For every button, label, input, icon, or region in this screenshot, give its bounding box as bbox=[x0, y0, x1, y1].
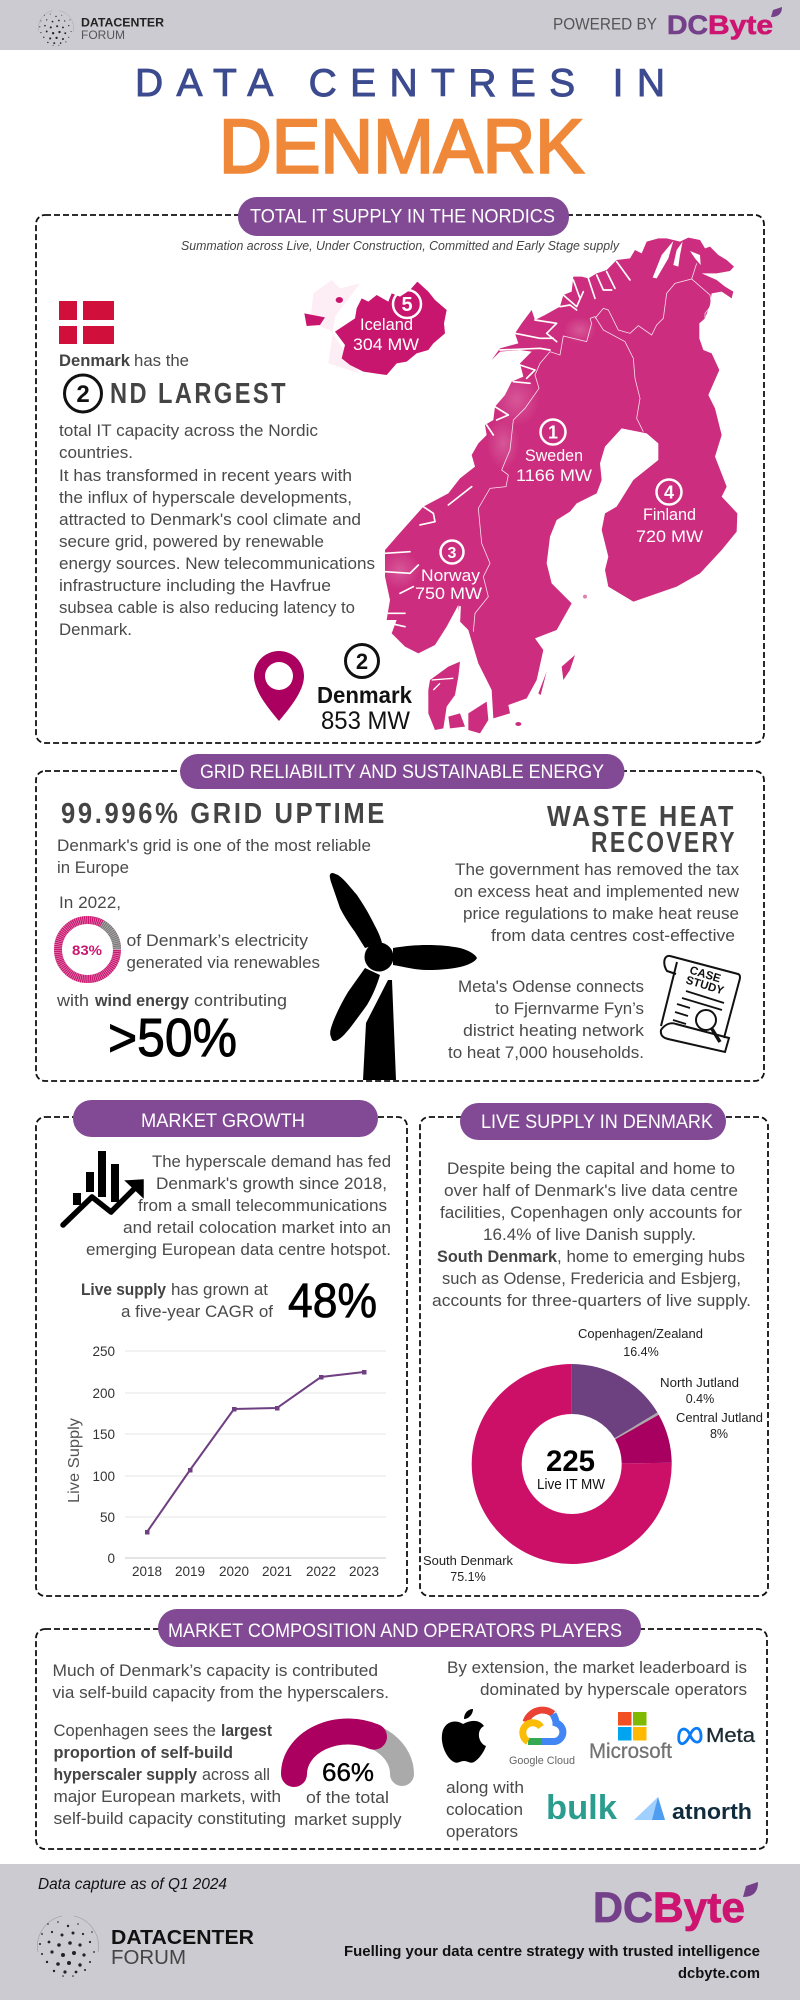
text: leaderboard: By extension, the market leaderboard is bbox=[447, 1659, 747, 1677]
label: Denmark: 853 MW bbox=[321, 707, 410, 735]
label: Finland bbox=[636, 480, 703, 546]
donut chart: live IT MW by region: North Jutland bbox=[660, 1376, 739, 1390]
line chart: live supply: 2019 bbox=[175, 1564, 205, 1579]
text: Denmark has the bbox=[59, 352, 189, 370]
text: hyperscale demand: The hyperscale demand has fed bbox=[152, 1153, 391, 1171]
label: Finland: 4 bbox=[664, 482, 674, 502]
text: self-build capacity: Much of Denmark’s capacity is contributed bbox=[52, 1662, 378, 1680]
label: Sweden bbox=[516, 420, 592, 485]
label: Denmark: Denmark bbox=[317, 682, 412, 708]
text: live supply summary: such as Odense, Fredericia and Esbjerg, bbox=[442, 1270, 741, 1288]
powered by DCByte: Byte bbox=[708, 10, 773, 40]
powered by DCByte bbox=[553, 7, 782, 40]
label: Norway: 3 bbox=[448, 545, 457, 562]
title: DENMARK bbox=[219, 105, 584, 190]
text: Meta Odense case: district heating network bbox=[463, 1022, 645, 1040]
donut chart: live IT MW by region bbox=[423, 1327, 763, 1584]
footer bbox=[0, 1864, 800, 2000]
icon: map pin bbox=[254, 651, 304, 721]
label: Denmark: 2 bbox=[356, 649, 368, 674]
line chart: live supply bbox=[66, 1344, 386, 1579]
body text: secure grid, powered by renewable bbox=[59, 533, 324, 551]
logo: Google Cloud: Google Cloud bbox=[509, 1755, 575, 1767]
map: Iceland and Greenland bbox=[304, 280, 447, 375]
donut chart: live IT MW by region: Copenhagen/Zealand bbox=[578, 1327, 703, 1341]
heading pill bbox=[460, 1103, 726, 1140]
text: live supply CAGR: Live supply bbox=[81, 1281, 167, 1299]
logo: Microsoft bbox=[589, 1712, 672, 1763]
line chart: live supply: 2020 bbox=[219, 1564, 249, 1579]
heading: grid uptime: 99.996% GRID UPTIME bbox=[61, 798, 387, 830]
text: live supply summary: Despite being the capital and home to bbox=[447, 1160, 735, 1178]
text: Copenhagen self-build: largest bbox=[221, 1722, 272, 1740]
text: Meta Odense case bbox=[448, 978, 645, 1062]
heading pill bbox=[238, 197, 569, 236]
text: hyperscale demand bbox=[86, 1153, 391, 1259]
line chart: live supply: 250 bbox=[92, 1344, 115, 1359]
map: Scandinavian mainland bbox=[380, 238, 737, 718]
icon: case study scroll: STUDY bbox=[684, 975, 725, 997]
label: Denmark bbox=[317, 644, 412, 735]
line chart: live supply: 0 bbox=[107, 1551, 115, 1566]
chart: 83% renewables ring bbox=[47, 909, 128, 990]
heading pill: TOTAL IT SUPPLY IN THE NORDICS bbox=[250, 207, 555, 228]
panel: total IT supply in the Nordics bbox=[36, 197, 764, 743]
body text bbox=[59, 422, 375, 639]
text: hyperscale demand: from a small telecommunications bbox=[138, 1197, 387, 1215]
label: Iceland bbox=[353, 290, 421, 354]
panel: market composition and operator players bbox=[36, 1609, 767, 1849]
text: colocation operators: along with bbox=[446, 1779, 524, 1797]
donut chart: live IT MW by region: Live IT MW bbox=[537, 1476, 606, 1493]
tagline bbox=[344, 1943, 760, 1982]
donut chart: live IT MW by region: 16.4% bbox=[623, 1345, 659, 1359]
text: waste heat policy: price regulations to make heat reuse bbox=[463, 905, 739, 923]
icon: case study scroll bbox=[661, 956, 740, 1052]
logo: bulk: bulk bbox=[546, 1789, 617, 1827]
chart: 66% gauge: market supply bbox=[294, 1811, 402, 1829]
icon: Danish flag bbox=[59, 301, 114, 344]
title: DATA CENTRES IN bbox=[135, 62, 665, 105]
line chart: live supply: 150 bbox=[92, 1427, 115, 1442]
donut chart: live IT MW by region: 225 bbox=[546, 1445, 595, 1478]
text: Copenhagen self-build: across all bbox=[202, 1766, 270, 1784]
text: hyperscale demand: emerging European data centre hotspot. bbox=[86, 1241, 391, 1259]
map: Nordic countries bbox=[304, 238, 737, 733]
heading: waste heat recovery bbox=[547, 801, 737, 859]
powered by DCByte: POWERED BY bbox=[553, 14, 657, 33]
text: waste heat policy: The government has removed the tax bbox=[455, 861, 740, 879]
stat: over 50 percent: >50% bbox=[108, 1008, 237, 1068]
heading: waste heat recovery: RECOVERY bbox=[591, 827, 737, 859]
heading pill bbox=[180, 754, 624, 789]
heading pill bbox=[73, 1100, 378, 1137]
text: Copenhagen self-build: proportion of self-build bbox=[54, 1744, 233, 1762]
text: colocation operators: operators bbox=[446, 1823, 518, 1841]
text: Denmark has the: has the bbox=[134, 352, 189, 370]
label: Iceland: 5 bbox=[401, 294, 413, 316]
line chart: live supply: 2023 bbox=[349, 1564, 379, 1579]
text: waste heat policy bbox=[454, 861, 740, 945]
chart: 83% renewables ring: 83% bbox=[72, 943, 102, 958]
panel: market growth bbox=[36, 1100, 407, 1596]
logo: Datacenter Forum: FORUM bbox=[81, 28, 125, 42]
logo: Google Cloud bbox=[509, 1710, 575, 1767]
tagline: Fuelling your data centre strategy with trusted intelligence bbox=[344, 1943, 760, 1960]
body text: total IT capacity across the Nordic bbox=[59, 422, 318, 440]
text: wind energy: wind energy bbox=[94, 992, 190, 1010]
logo: DCByte: DC bbox=[593, 1884, 653, 1932]
heading pill: MARKET GROWTH bbox=[141, 1111, 305, 1132]
text: live supply CAGR bbox=[81, 1281, 273, 1321]
text: hyperscale demand: Denmark's growth since 2018, bbox=[156, 1175, 387, 1193]
icon: growth chart arrow bbox=[63, 1151, 143, 1225]
title bbox=[135, 62, 665, 190]
label: Sweden: Sweden bbox=[525, 446, 583, 465]
body text: countries. bbox=[59, 444, 133, 462]
callout: 2nd largest: 2 bbox=[76, 381, 90, 408]
line chart: live supply: 2018 bbox=[132, 1564, 162, 1579]
text: grid reliability: in Europe bbox=[57, 859, 129, 877]
text: wind energy: with bbox=[56, 992, 89, 1010]
line chart: live supply: 50 bbox=[100, 1510, 115, 1525]
icon: case study scroll: CASE bbox=[688, 965, 722, 986]
subtitle: Summation across Live, Under Construction, Committed and Early Stage supply bbox=[181, 238, 620, 253]
label: Sweden: 1166 MW bbox=[516, 466, 592, 485]
text: renewables bbox=[126, 932, 320, 972]
text: Denmark has the: Denmark bbox=[59, 352, 131, 370]
powered by DCByte: DC bbox=[667, 10, 708, 40]
heading: waste heat recovery: WASTE HEAT bbox=[547, 801, 736, 833]
text: Copenhagen self-build: Copenhagen sees the bbox=[54, 1722, 216, 1740]
text: wind energy bbox=[56, 992, 287, 1010]
text: Meta Odense case: to Fjernvarme Fyn’s bbox=[495, 1000, 644, 1018]
tagline: dcbyte.com bbox=[678, 1965, 760, 1982]
header bar bbox=[0, 0, 800, 50]
body text: attracted to Denmark's cool climate and bbox=[59, 511, 361, 529]
callout: 2nd largest bbox=[64, 375, 288, 412]
heading pill: GRID RELIABILITY AND SUSTAINABLE ENERGY bbox=[200, 762, 604, 783]
text: Meta Odense case: Meta's Odense connects bbox=[458, 978, 644, 996]
callout: 2nd largest: ND LARGEST bbox=[110, 378, 288, 410]
logo: Datacenter Forum: FORUM bbox=[111, 1947, 186, 1969]
heading pill bbox=[158, 1609, 641, 1647]
body text: subsea cable is also reducing latency to bbox=[59, 599, 355, 617]
text: Copenhagen self-build: major European markets, with bbox=[54, 1788, 281, 1806]
label: Norway bbox=[415, 540, 482, 603]
data capture note: Data capture as of Q1 2024 bbox=[38, 1876, 227, 1893]
text: live supply summary: over half of Denmark's live data centre bbox=[444, 1182, 738, 1200]
donut chart: live IT MW by region: 75.1% bbox=[450, 1570, 486, 1584]
text: waste heat policy: from data centres cost-effective bbox=[491, 927, 735, 945]
donut chart: live IT MW by region: South Denmark bbox=[423, 1554, 514, 1568]
label: Finland: 720 MW bbox=[636, 527, 703, 546]
panel: live supply in Denmark bbox=[420, 1103, 768, 1596]
text: Copenhagen self-build: self-build capacity constituting bbox=[54, 1810, 286, 1828]
label: Iceland: 304 MW bbox=[353, 335, 419, 354]
label: Norway: Norway bbox=[421, 566, 481, 585]
body text: It has transformed in recent years with bbox=[59, 467, 352, 485]
logo: Microsoft: Microsoft bbox=[589, 1740, 672, 1763]
logo: DCByte bbox=[593, 1882, 758, 1932]
donut chart: live IT MW by region: 0.4% bbox=[686, 1392, 714, 1406]
line chart: live supply: 2022 bbox=[306, 1564, 336, 1579]
text: live supply summary: , home to emerging hubs bbox=[557, 1248, 745, 1266]
chart: 66% gauge: 66% bbox=[322, 1759, 374, 1787]
text: self-build capacity bbox=[52, 1662, 389, 1702]
chart: 66% gauge bbox=[294, 1731, 402, 1829]
body text: infrastructure including the Havfrue bbox=[59, 577, 331, 595]
text: grid reliability bbox=[57, 837, 371, 912]
text: live supply CAGR: has grown at bbox=[171, 1281, 268, 1299]
text: live supply CAGR: a five-year CAGR of bbox=[121, 1303, 273, 1321]
logo: Datacenter Forum bbox=[38, 11, 165, 46]
text: grid reliability: In 2022, bbox=[59, 894, 121, 912]
logo: DCByte: Byte bbox=[653, 1884, 745, 1932]
logo: atNorth bbox=[634, 1797, 752, 1824]
text: Meta Odense case: to heat 7,000 households. bbox=[448, 1044, 644, 1062]
text: live supply summary: 16.4% of live Danish supply. bbox=[483, 1226, 696, 1244]
text: leaderboard bbox=[447, 1659, 747, 1699]
label: Finland: Finland bbox=[643, 505, 696, 524]
text: self-build capacity: via self-build capacity from the hyperscalers. bbox=[52, 1684, 389, 1702]
logo: atNorth: atnorth bbox=[672, 1799, 752, 1824]
heading pill: LIVE SUPPLY IN DENMARK bbox=[481, 1112, 713, 1133]
logo: Apple bbox=[442, 1709, 486, 1763]
text: hyperscale demand: and retail colocation market into an bbox=[123, 1219, 391, 1237]
logo: Meta bbox=[679, 1725, 756, 1747]
text: Copenhagen self-build: hyperscaler supply bbox=[54, 1766, 198, 1784]
donut chart: live IT MW by region: 8% bbox=[710, 1427, 728, 1441]
line chart: live supply: 100 bbox=[92, 1469, 115, 1484]
line chart: live supply: Live Supply bbox=[66, 1418, 83, 1503]
label: Norway: 750 MW bbox=[415, 584, 482, 603]
logo: Datacenter Forum bbox=[37, 1916, 255, 1977]
icon: wind turbine bbox=[330, 873, 477, 1080]
text: renewables: of Denmark’s electricity bbox=[126, 932, 309, 950]
text: renewables: generated via renewables bbox=[126, 954, 320, 972]
text: Copenhagen self-build bbox=[54, 1722, 286, 1828]
heading pill: MARKET COMPOSITION AND OPERATORS PLAYERS bbox=[168, 1621, 622, 1642]
line chart: live supply: 200 bbox=[92, 1386, 115, 1401]
label: Iceland: Iceland bbox=[360, 315, 413, 334]
body text: Denmark. bbox=[59, 621, 132, 639]
logo: Datacenter Forum: DATACENTER bbox=[111, 1927, 255, 1949]
text: colocation operators bbox=[446, 1779, 524, 1841]
chart: 66% gauge: of the total bbox=[306, 1789, 389, 1807]
text: waste heat policy: on excess heat and implemented new bbox=[454, 883, 739, 901]
panel: grid reliability and sustainable energy bbox=[36, 754, 764, 1081]
text: live supply summary bbox=[432, 1160, 751, 1310]
text: colocation operators: colocation bbox=[446, 1801, 523, 1819]
donut chart: live IT MW by region: Central Jutland bbox=[676, 1411, 763, 1425]
body text: energy sources. New telecommunications bbox=[59, 555, 375, 573]
text: wind energy: contributing bbox=[194, 992, 287, 1010]
text: live supply summary: accounts for three-quarters of live supply. bbox=[432, 1292, 751, 1310]
text: live supply summary: South Denmark bbox=[437, 1248, 558, 1266]
text: live supply summary: facilities, Copenhagen only accounts for bbox=[440, 1204, 743, 1222]
logo: Meta: Meta bbox=[706, 1725, 756, 1747]
map: Denmark and Baltic islands bbox=[428, 595, 587, 733]
body text: the influx of hyperscale developments, bbox=[59, 489, 352, 507]
logo: Datacenter Forum: DATACENTER bbox=[81, 18, 165, 30]
line chart: live supply: 2021 bbox=[262, 1564, 292, 1579]
stat: 48 percent: 48% bbox=[288, 1275, 377, 1328]
text: leaderboard: dominated by hyperscale operators bbox=[480, 1681, 747, 1699]
label: Sweden: 1 bbox=[548, 422, 558, 442]
text: grid reliability: Denmark's grid is one of the most reliable bbox=[57, 837, 371, 855]
